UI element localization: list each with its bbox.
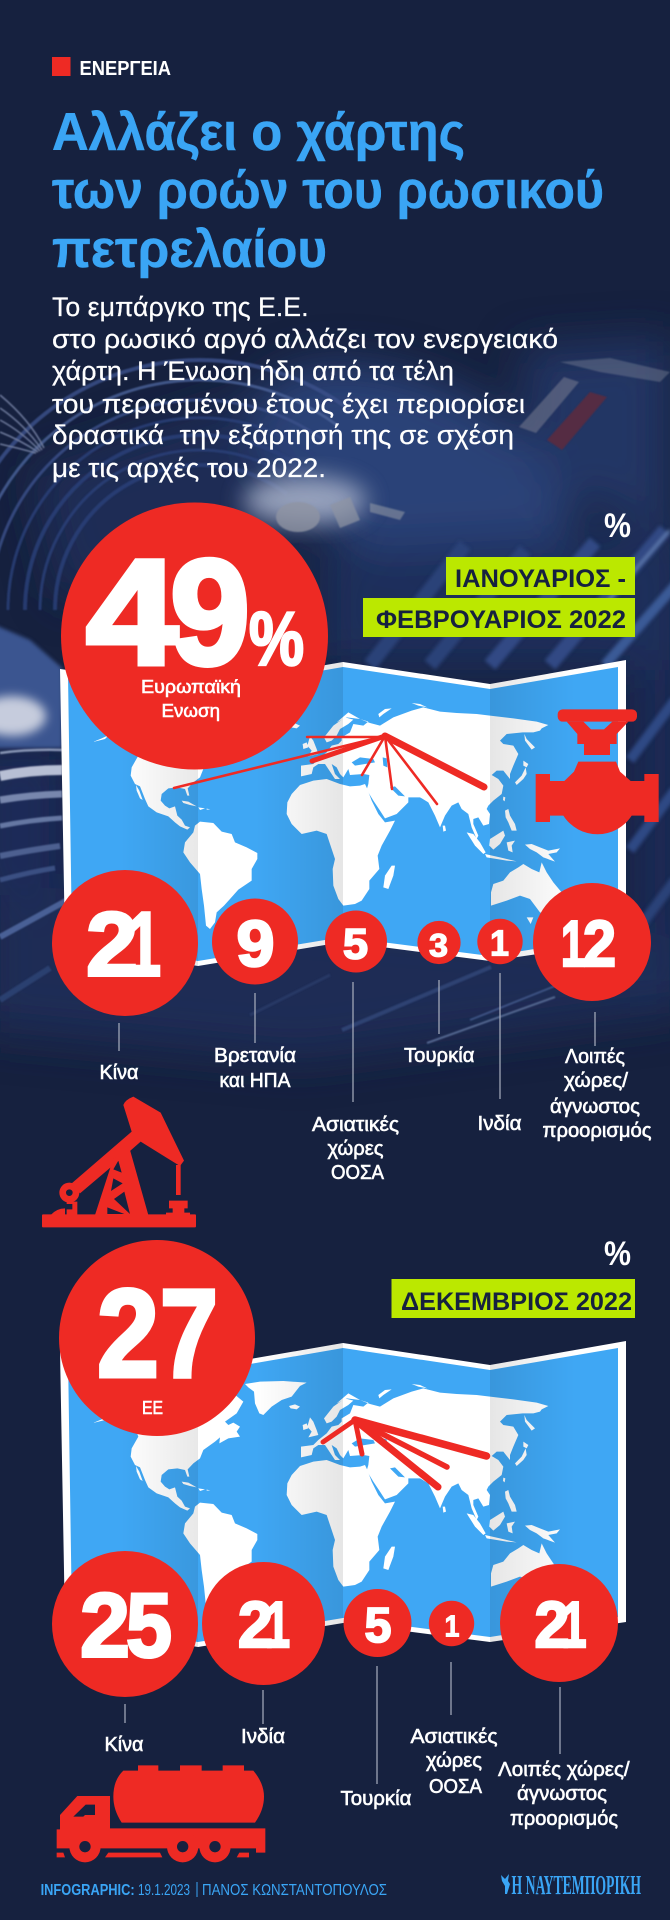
stat: China 21: 1 [127,894,161,996]
section label: energy [52,57,171,80]
oil lettering on barrel [276,358,670,532]
stat: other countries 12: 1 [561,907,585,980]
stat: other countries 21 [498,1564,630,1830]
stat: Asian OECD 1 [410,1601,498,1798]
intro text: Το εμπάργκο της Ε.Ε. [52,292,308,322]
stat: India 21: 1 [265,1588,290,1661]
big circle: EU 49% [61,502,328,770]
diagonal ribs lower [0,897,570,1043]
stat: Turkey 3: 3 [429,928,448,964]
stat: other countries 21: 2 [534,1588,570,1661]
stat: Britain and USA 9: και ΗΠΑ [220,1070,291,1092]
big circle: EU 49%: 9 [170,528,250,696]
intro text [52,292,558,483]
stat: India 21: 2 [238,1588,273,1661]
section label: energy: ΕΝΕΡΓΕΙΑ [80,58,171,80]
big circle: EU 27: ΕΕ [142,1398,163,1418]
flag on barrel [519,377,607,450]
period label: January-February 2022: ΦΕΒΡΟΥΑΡΙΟΣ 2022 [376,606,626,634]
big circle: EU 27: 2 [97,1264,159,1404]
stat: Asian OECD 1: χώρες [426,1750,482,1772]
stat: other countries 12: προορισμός [542,1120,652,1142]
stat: China 21 [52,870,198,1084]
stat: India 1: 1 [490,922,509,964]
stat: other countries 21: Λοιπές χώρες/ [498,1759,630,1781]
title: Αλλάζει ο χάρτης [52,103,465,162]
stat: India 21: Ινδία [241,1726,285,1748]
stat: China 21: Κίνα [100,1062,138,1084]
stat: Asian OECD 1: Ασιατικές [410,1726,498,1748]
icon: valve [536,709,659,834]
stat: other countries 12: Λοιπές [565,1046,625,1068]
stat: China 25: 2 [80,1576,130,1676]
stat: other countries 12: άγνωστος [550,1096,640,1118]
flow arrows: second period [323,1420,486,1487]
stat: Turkey 5 [340,1589,412,1810]
stat: Asian OECD 5: χώρες [328,1138,384,1160]
stat: Turkey 3: Τουρκία [404,1045,474,1067]
lit barrel left edge [0,625,62,748]
intro text: του περασμένου έτους έχει περιορίσει [52,389,525,419]
footer credit [41,1882,387,1899]
intro text: χάρτη. Η Ένωση ήδη από τα τέλη [52,356,454,386]
stat: other countries 12: χώρες/ [564,1070,628,1092]
stat: Britain and USA 9 [212,898,298,1092]
period label: January-February 2022 [363,557,635,637]
stat: other countries 21: προορισμός [510,1808,618,1830]
percent sign: first period: % [604,507,631,545]
stat: Asian OECD 5: ΟΟΣΑ [331,1162,385,1184]
stat: China 25: Κίνα [104,1734,144,1756]
world map: second period [60,1341,626,1647]
intro text: με τις αρχές του 2022. [52,453,326,483]
stat: other countries 21: άγνωστος [517,1783,607,1805]
footer credit: 19.1.2023 [138,1882,190,1899]
stat: other countries 12: 2 [583,907,616,980]
stat: other countries 21: 1 [562,1588,586,1661]
stat: Turkey 5: 5 [364,1599,392,1653]
percent sign: second period: % [604,1235,631,1273]
icon: oil pump jack [42,1097,196,1227]
title: πετρελαίου [52,220,327,279]
intro text: στο ρωσικό αργό αλλάζει τον ενεργειακό [52,324,558,354]
barrel ribs left [0,750,62,880]
period label: January-February 2022: ΙΑΝΟΥΑΡΙΟΣ - [455,565,626,593]
big circle: EU 27 [59,1240,255,1436]
intro text: δραστικά την εξάρτησή της σε σχέση [52,420,514,450]
stat: India 1 [477,919,523,1135]
period label: December 2022: ΔΕΚΕΜΒΡΙΟΣ 2022 [401,1288,632,1316]
stat: Asian OECD 5 [312,910,399,1184]
stat: China 25: 5 [126,1576,172,1676]
big circle: EU 49%: Ευρωπαϊκή [141,677,241,697]
barrel end arcs [0,360,350,610]
big circle: EU 49%: % [249,597,304,682]
big circle: EU 49%: Ενωση [162,701,220,721]
world map: first period [60,660,626,966]
flow arrows: first period [174,736,484,804]
stat: Asian OECD 1: 1 [444,1608,460,1644]
stat: Asian OECD 1: ΟΟΣΑ [429,1776,483,1798]
lit centre barrel [243,476,367,524]
footer credit: ΠΑΝΟΣ ΚΩΝΣΤΑΝΤΟΠΟΥΛΟΣ [202,1882,387,1899]
red square [52,57,70,76]
footer credit: INFOGRAPHIC: [41,1882,135,1899]
stat: other countries 12 [533,883,652,1142]
stat: Asian OECD 5: Ασιατικές [312,1114,399,1136]
stat: Turkey 5: Τουρκία [340,1788,412,1810]
big circle: EU 49%: 4 [86,528,178,696]
bright bundle of ridges upper left [0,395,44,453]
stat: Britain and USA 9: Βρετανία [214,1045,296,1067]
stat: Asian OECD 5: 5 [343,920,368,968]
title [52,103,604,279]
stat: Turkey 3 [404,921,474,1067]
stat: Britain and USA 9: 9 [236,907,274,980]
stat: China 25 [52,1551,198,1756]
diagonal ribs right [370,530,670,940]
stat: India 1: Ινδία [478,1113,522,1135]
title: των ροών του ρωσικού [52,161,604,220]
stat: India 21 [202,1562,325,1748]
stat: China 21: 2 [86,894,138,996]
icon: tanker truck [57,1765,265,1862]
period label: December 2022 [392,1279,635,1318]
big circle: EU 27: 7 [160,1264,218,1404]
